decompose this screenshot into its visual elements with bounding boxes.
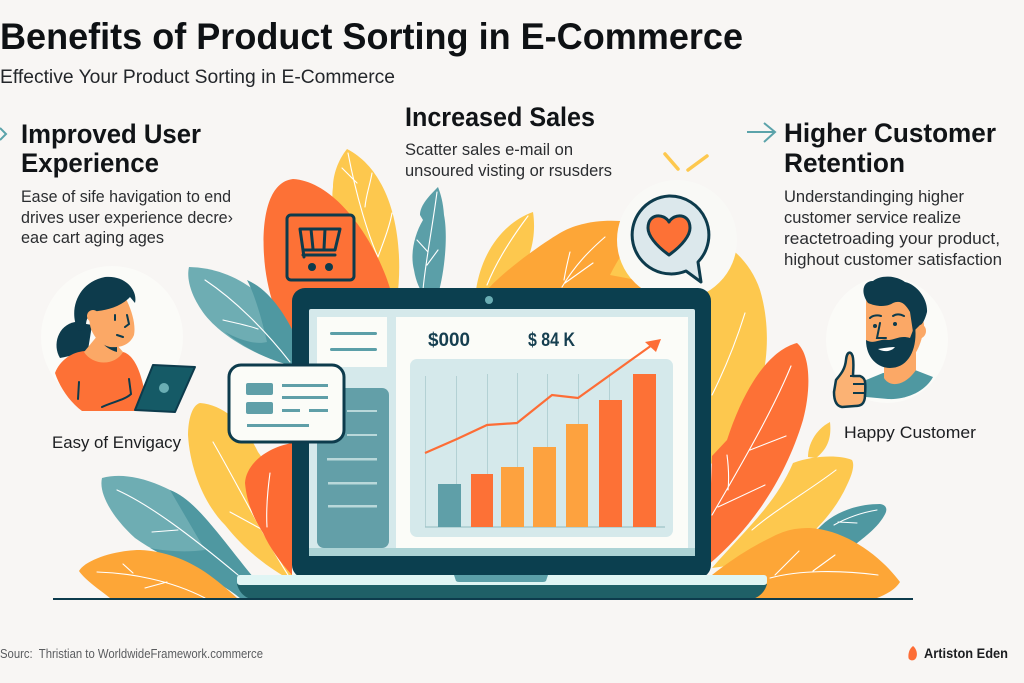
title: Benefits of Product Sorting in E-Commerce: [0, 16, 743, 57]
heading: higher customer retention: Retention: [784, 148, 905, 178]
teal shirt: [866, 370, 933, 399]
left body text: Ease of sife havigation to end: [21, 187, 231, 206]
neck: [84, 335, 123, 362]
smile: [878, 347, 895, 351]
leaf: upper left teal: [188, 267, 295, 366]
trend line arrow: [425, 339, 661, 453]
leaf: center orange: [487, 221, 660, 300]
right body text: [784, 187, 1002, 269]
icon: heart speech bubble: [632, 154, 709, 282]
right benefit text block: [747, 118, 1002, 269]
icon: shopping cart: [287, 215, 354, 280]
illustration: woman with tablet: [41, 266, 195, 412]
center body text: [405, 140, 612, 180]
brand logo: [908, 646, 1008, 661]
center body text: unsoured visting or rsusders: [405, 161, 612, 180]
ear: [87, 310, 99, 322]
background disc behind heart bubble: [617, 180, 737, 300]
leaf: lower left red-orange: [245, 443, 292, 575]
neck: [884, 350, 916, 384]
sidebar header card: [317, 317, 387, 367]
caption: easy of envigacy: Easy of Envigacy: [52, 433, 181, 452]
brand name: Artiston Eden: [924, 646, 1008, 661]
arrow: right heading marker: [747, 123, 775, 142]
hair: [863, 277, 927, 332]
center body text: Scatter sales e-mail on: [405, 140, 573, 159]
leaf: lower left teal: [101, 476, 255, 598]
eyes and nose: [870, 314, 904, 338]
left body text: [21, 187, 233, 247]
leaf: top orange: [264, 179, 392, 350]
background disc: [41, 266, 183, 408]
leaf: lower right yellow: [712, 457, 853, 568]
revenue figures: $000: [428, 330, 470, 351]
laptop base: [237, 575, 767, 600]
floating list card: [229, 365, 344, 442]
icon: orange leaf: [908, 646, 917, 660]
leaf: lower right teal: [817, 504, 886, 545]
neck shadow: [100, 340, 117, 352]
sidebar teal panel: [317, 388, 389, 548]
heading: higher customer retention: Higher Customer: [784, 118, 996, 148]
leaf: right orange: [708, 343, 808, 565]
hair back: [56, 322, 92, 358]
arm lines: [78, 379, 131, 407]
beard: [866, 325, 916, 368]
webcam: [485, 296, 493, 304]
source note: Sourc: Thristian to WorldwideFramework.commerce: [0, 646, 263, 661]
laptop: [237, 288, 767, 600]
shirt: [55, 351, 145, 411]
bars: [438, 374, 656, 527]
leaf: lower left orange: [79, 550, 237, 598]
hair top: [74, 277, 135, 331]
facial features: [115, 315, 129, 337]
caption: happy customer: Happy Customer: [844, 423, 976, 442]
leaf: lower left yellow: [188, 403, 292, 578]
face: [88, 297, 135, 347]
heading: increased sales: Increased Sales: [405, 102, 595, 132]
revenue figures: [428, 330, 575, 351]
heading: improved user experience: Improved User: [21, 119, 201, 149]
right body text: Understandinging higher: [784, 187, 964, 206]
right body text: customer service realize: [784, 208, 961, 227]
laptop screen: [309, 309, 695, 556]
leaf: right big yellow: [610, 225, 767, 470]
thumbs up hand: [834, 353, 865, 407]
face: [866, 295, 924, 366]
left benefit text block: [0, 119, 233, 247]
leaf: small center teal: [412, 187, 446, 295]
right body text: reactetroading your product,: [784, 229, 1000, 248]
heading: improved user experience: [21, 119, 201, 178]
revenue figures: $ 84 K: [528, 330, 575, 351]
center benefit text block: [405, 102, 612, 180]
ground line: [53, 598, 913, 600]
left body text: drives user experience decre›: [21, 208, 233, 227]
left body text: eae cart aging ages: [21, 228, 164, 247]
heading: improved user experience: Experience: [21, 148, 159, 178]
leaf: top yellow: [332, 149, 399, 300]
leaf: center yellow: [476, 212, 534, 290]
leaf: lower right orange: [712, 528, 900, 598]
foliage behind the laptop: [79, 149, 900, 598]
laptop lid: [292, 288, 711, 578]
arrow: left heading marker: [0, 128, 6, 140]
sales chart: [410, 339, 673, 537]
tablet: [135, 365, 195, 412]
heading: higher customer retention: [784, 118, 996, 178]
subtitle: Effective Your Product Sorting in E-Commerce: [0, 67, 395, 88]
leaf: small yellow sprout: [808, 422, 830, 458]
illustration: happy bearded customer: [826, 277, 948, 407]
background disc: [826, 277, 948, 403]
right body text: highout customer satisfaction: [784, 250, 1002, 269]
